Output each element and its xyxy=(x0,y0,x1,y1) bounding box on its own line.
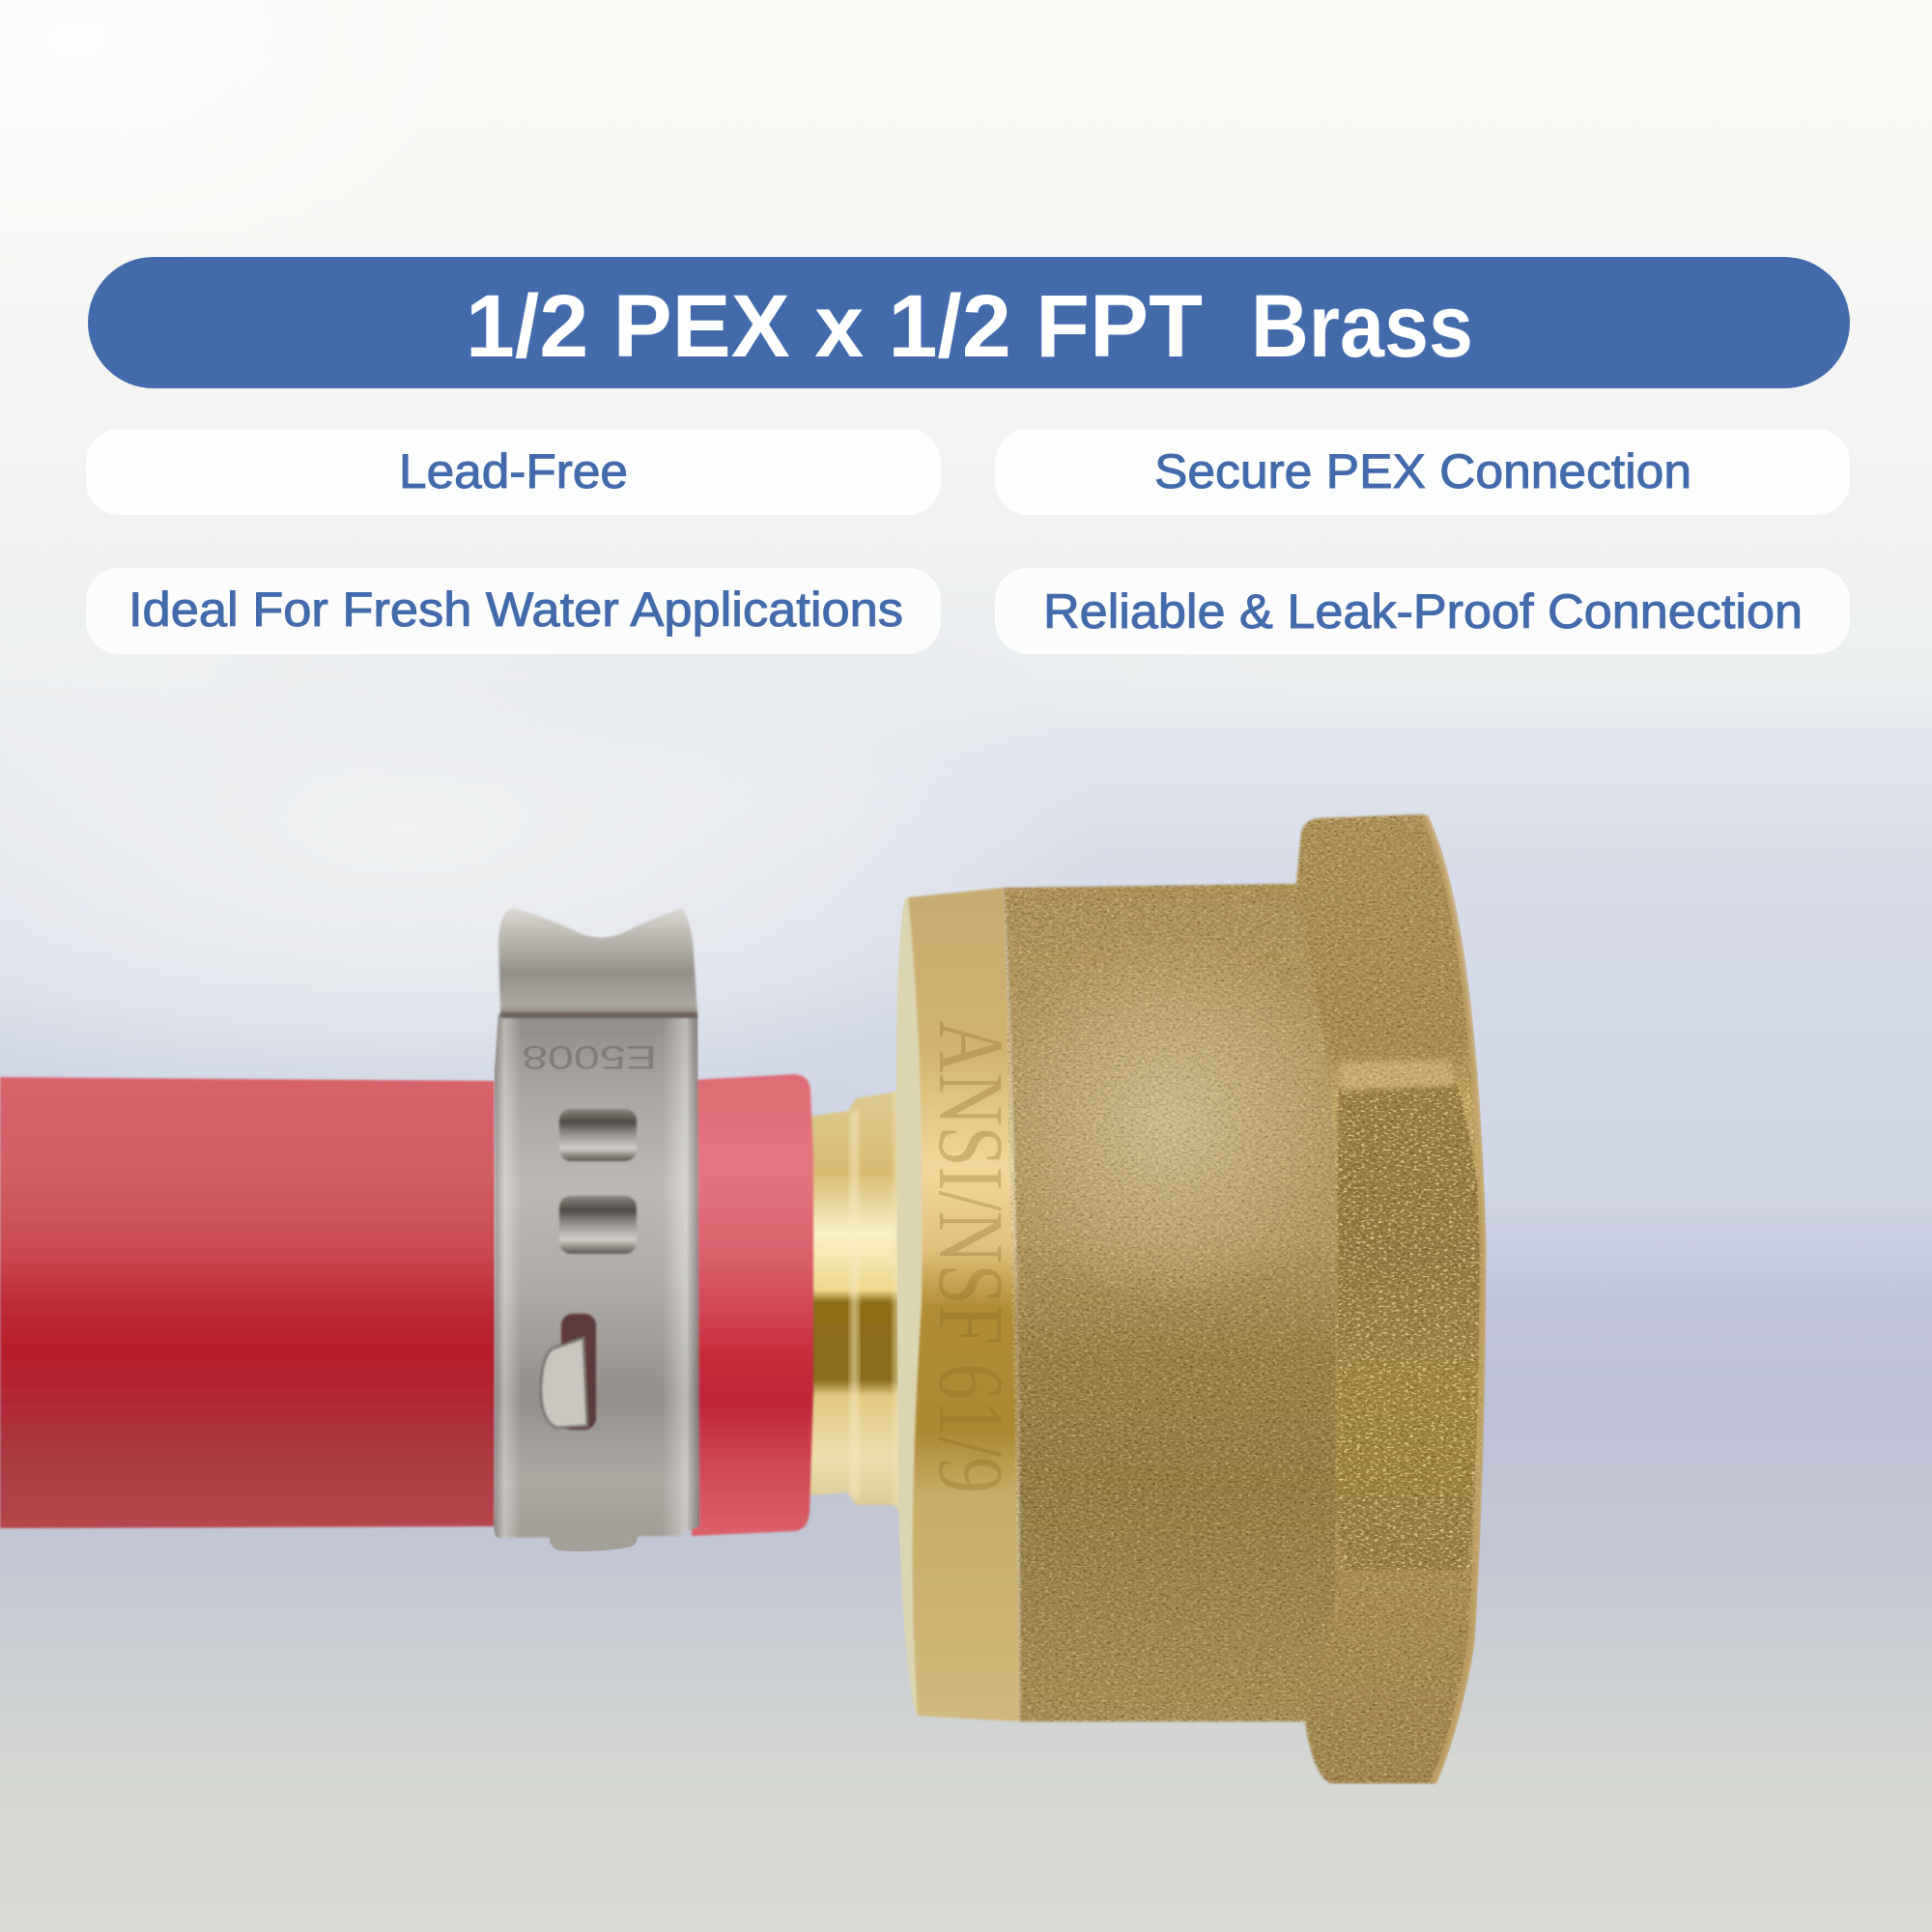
product photo: PEX pipe with clamp and brass fitting xyxy=(0,811,1487,1792)
title text: 1/2 PEX x 1/2 FPT xyxy=(466,277,1203,376)
stamped band text: E5008 xyxy=(522,1038,657,1075)
casting grain texture xyxy=(1004,811,1487,1792)
red PEX pipe, left section xyxy=(0,1077,495,1528)
clamp ear, top xyxy=(498,908,697,1014)
slot 1 xyxy=(559,1109,637,1161)
dark seam under ear xyxy=(500,1012,697,1018)
smooth stamped ring xyxy=(908,888,1020,1721)
feature chip: Reliable & Leak-Proof Connection: Reliable & Leak-Proof Connection xyxy=(1043,584,1803,639)
feature chip: Lead-Free: Lead-Free xyxy=(399,444,628,498)
locking tab slot xyxy=(561,1314,596,1430)
clamp nub, bottom xyxy=(550,1531,638,1551)
knurled body xyxy=(1004,884,1337,1721)
hex side facet xyxy=(1337,1082,1482,1570)
hex rim highlight xyxy=(1425,816,1483,1782)
facet highlight band xyxy=(1339,1061,1457,1092)
slot 2 xyxy=(559,1196,637,1254)
brass barb stem xyxy=(808,1063,916,1546)
stamped ring text: ANSI/NSF 61/9 xyxy=(920,1020,1023,1493)
ring pale back edge xyxy=(896,898,927,1715)
clamp band xyxy=(495,1014,699,1538)
red PEX pipe, end section inside barb xyxy=(692,1074,813,1536)
feature chip: Reliable & Leak-Proof Connection xyxy=(995,568,1850,654)
band edge shading xyxy=(495,1014,699,1538)
title bar xyxy=(88,257,1850,388)
feature chip: Secure PEX Connection xyxy=(995,429,1850,515)
stainless steel clamp xyxy=(495,908,699,1551)
feature chip: Ideal For Fresh Water Applications: Ideal For Fresh Water Applications xyxy=(128,582,903,637)
feature chip: Lead-Free xyxy=(86,429,941,515)
hex end xyxy=(1285,814,1485,1783)
title text: Brass xyxy=(1251,277,1473,376)
brass nut body xyxy=(896,811,1487,1792)
body highlight xyxy=(1020,964,1318,1279)
feature chip: Secure PEX Connection: Secure PEX Connection xyxy=(1154,444,1691,498)
locking tab xyxy=(541,1338,587,1428)
feature chip: Ideal For Fresh Water Applications xyxy=(86,568,941,654)
